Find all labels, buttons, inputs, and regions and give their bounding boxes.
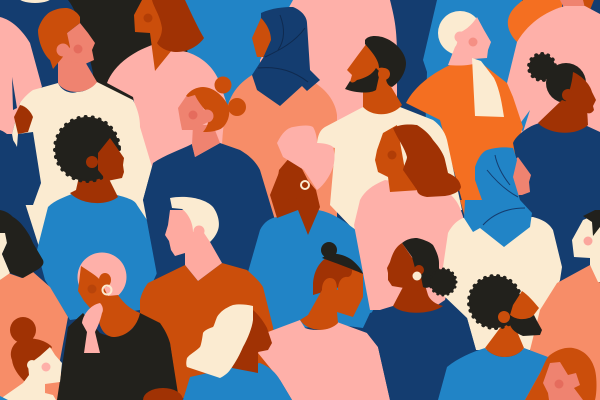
ear (86, 156, 98, 168)
person: bearded man in cream shirt (317, 36, 462, 230)
hair (583, 210, 600, 236)
shirt (140, 263, 280, 400)
backdrop: black person (68, 0, 193, 100)
backdrop: blue person top right (423, 0, 528, 140)
ear (27, 360, 37, 370)
ear (414, 265, 424, 275)
face (543, 362, 583, 400)
hair: cream top left (18, 0, 52, 3)
earring (301, 181, 309, 189)
hair (365, 36, 406, 87)
backdrop: blue person (185, 0, 300, 110)
shirt (354, 180, 464, 310)
person: woman with pale hair in blue (183, 304, 292, 400)
ear (498, 311, 510, 323)
person: man in pink with topknot (258, 242, 390, 400)
hijab fold (483, 155, 525, 225)
person: woman in navy hijab (222, 7, 337, 220)
top (57, 313, 179, 400)
hijab fold (258, 15, 308, 82)
pink hat (277, 126, 334, 190)
skin (78, 266, 140, 337)
person: bun woman in navy sweater (143, 76, 275, 275)
orange sliver (460, 200, 483, 218)
cream scarf (472, 58, 504, 117)
ear (99, 273, 111, 287)
head back (313, 258, 363, 295)
hair (152, 0, 204, 52)
neck and v (270, 165, 320, 235)
earring (102, 286, 112, 294)
person: pink top left (0, 17, 42, 134)
spike: arm fold (12, 77, 17, 110)
bun (430, 269, 456, 295)
shirt (248, 209, 378, 330)
person: redhead man in cream sweater (12, 8, 152, 250)
neck (192, 125, 220, 157)
person: woman in peach far right (525, 210, 600, 400)
beard (510, 315, 542, 336)
face and neck (448, 17, 491, 66)
orange jumper (406, 62, 523, 230)
blush (584, 236, 592, 246)
skin (232, 310, 272, 373)
blush (188, 110, 198, 120)
hair (11, 338, 52, 382)
hair (186, 87, 229, 132)
cream shirt (443, 217, 562, 350)
shirt (107, 45, 232, 190)
ear (454, 32, 466, 42)
sliver: rust hair top right (583, 0, 594, 10)
bun right (228, 98, 246, 116)
bun (529, 54, 555, 80)
sleeve (0, 130, 41, 205)
ear (378, 68, 390, 80)
blush (42, 362, 50, 372)
peach shirt (0, 272, 68, 400)
beard (345, 68, 380, 93)
person: navy arm with raised fist (0, 105, 41, 205)
shirt (183, 363, 292, 400)
face and neck (300, 270, 363, 330)
neck (393, 285, 443, 313)
afro (55, 117, 119, 181)
shirt (438, 348, 548, 400)
skin (134, 0, 175, 71)
person: bearded man with afro (438, 276, 548, 400)
face (510, 291, 539, 322)
face (565, 72, 596, 113)
ear (194, 226, 204, 236)
ear (200, 110, 214, 122)
spike: blue arm gap (519, 110, 530, 132)
hair band (322, 254, 363, 274)
sweater (143, 143, 275, 275)
face (252, 18, 273, 57)
peach top (525, 265, 600, 400)
hair (525, 348, 596, 400)
neck (70, 172, 118, 203)
peach shirt (222, 75, 337, 220)
person: woman with long brown hair (107, 0, 232, 190)
hair (170, 197, 219, 242)
skin (165, 210, 222, 281)
blush (74, 44, 82, 54)
face (98, 138, 124, 181)
navy top (513, 123, 600, 300)
face (387, 243, 425, 292)
skin (572, 213, 600, 282)
person: blonde with orange jumper (406, 11, 523, 230)
face (510, 157, 531, 195)
shirt (317, 107, 462, 230)
shirt (12, 82, 152, 250)
blush (388, 150, 396, 160)
blush (468, 38, 478, 46)
skin (3, 347, 62, 400)
braid (82, 303, 103, 353)
hair (0, 210, 43, 278)
neck (363, 70, 402, 114)
hair (186, 304, 253, 378)
fist (14, 105, 33, 134)
person: woman in blue hijab and cream (443, 147, 562, 350)
face (0, 233, 10, 280)
blush (144, 14, 152, 22)
ear (562, 89, 574, 101)
person: afro in blue shirt (37, 117, 157, 320)
pink hair (78, 252, 126, 302)
hair dome bottom (143, 388, 183, 400)
sliver: salmon neck top right (560, 0, 585, 8)
face (347, 43, 390, 88)
navy hijab (252, 7, 320, 106)
earring (412, 272, 422, 280)
person: top right orange hair (508, 0, 562, 50)
hair (38, 8, 80, 69)
person: woman with black bun hair (513, 54, 600, 300)
blush (554, 380, 564, 388)
hem (0, 396, 8, 400)
neck (58, 55, 97, 92)
face (62, 23, 95, 64)
skin (375, 125, 420, 192)
person: woman with black hair far left (0, 210, 68, 400)
shirt (37, 193, 157, 320)
person: bottom right woman with rust hair (525, 348, 596, 400)
bun (10, 317, 36, 343)
hijab (464, 147, 532, 247)
person: woman in navy with low bun (363, 238, 476, 400)
person: woman with pink hair in black top (57, 252, 179, 400)
hair (402, 238, 439, 288)
afro (469, 276, 521, 328)
bun left (214, 76, 232, 94)
neck (485, 322, 524, 357)
neck (538, 100, 588, 133)
person: long curly hair woman in pink (354, 124, 464, 310)
person: blue shirt woman (248, 126, 378, 330)
blush (88, 284, 96, 294)
topknot (321, 242, 337, 258)
face (178, 90, 208, 130)
backdrop: pink person top centre (260, 0, 397, 150)
person: man in rust shirt (140, 197, 280, 400)
hair (393, 124, 461, 197)
person: large pink top right (505, 6, 600, 170)
top (363, 306, 476, 400)
shirt (258, 320, 390, 400)
person: navy top left (0, 0, 93, 100)
person: bottom left woman with bun (0, 317, 62, 400)
face (277, 157, 316, 200)
hair (546, 63, 586, 103)
blonde hair (438, 11, 482, 55)
ear (56, 44, 70, 56)
